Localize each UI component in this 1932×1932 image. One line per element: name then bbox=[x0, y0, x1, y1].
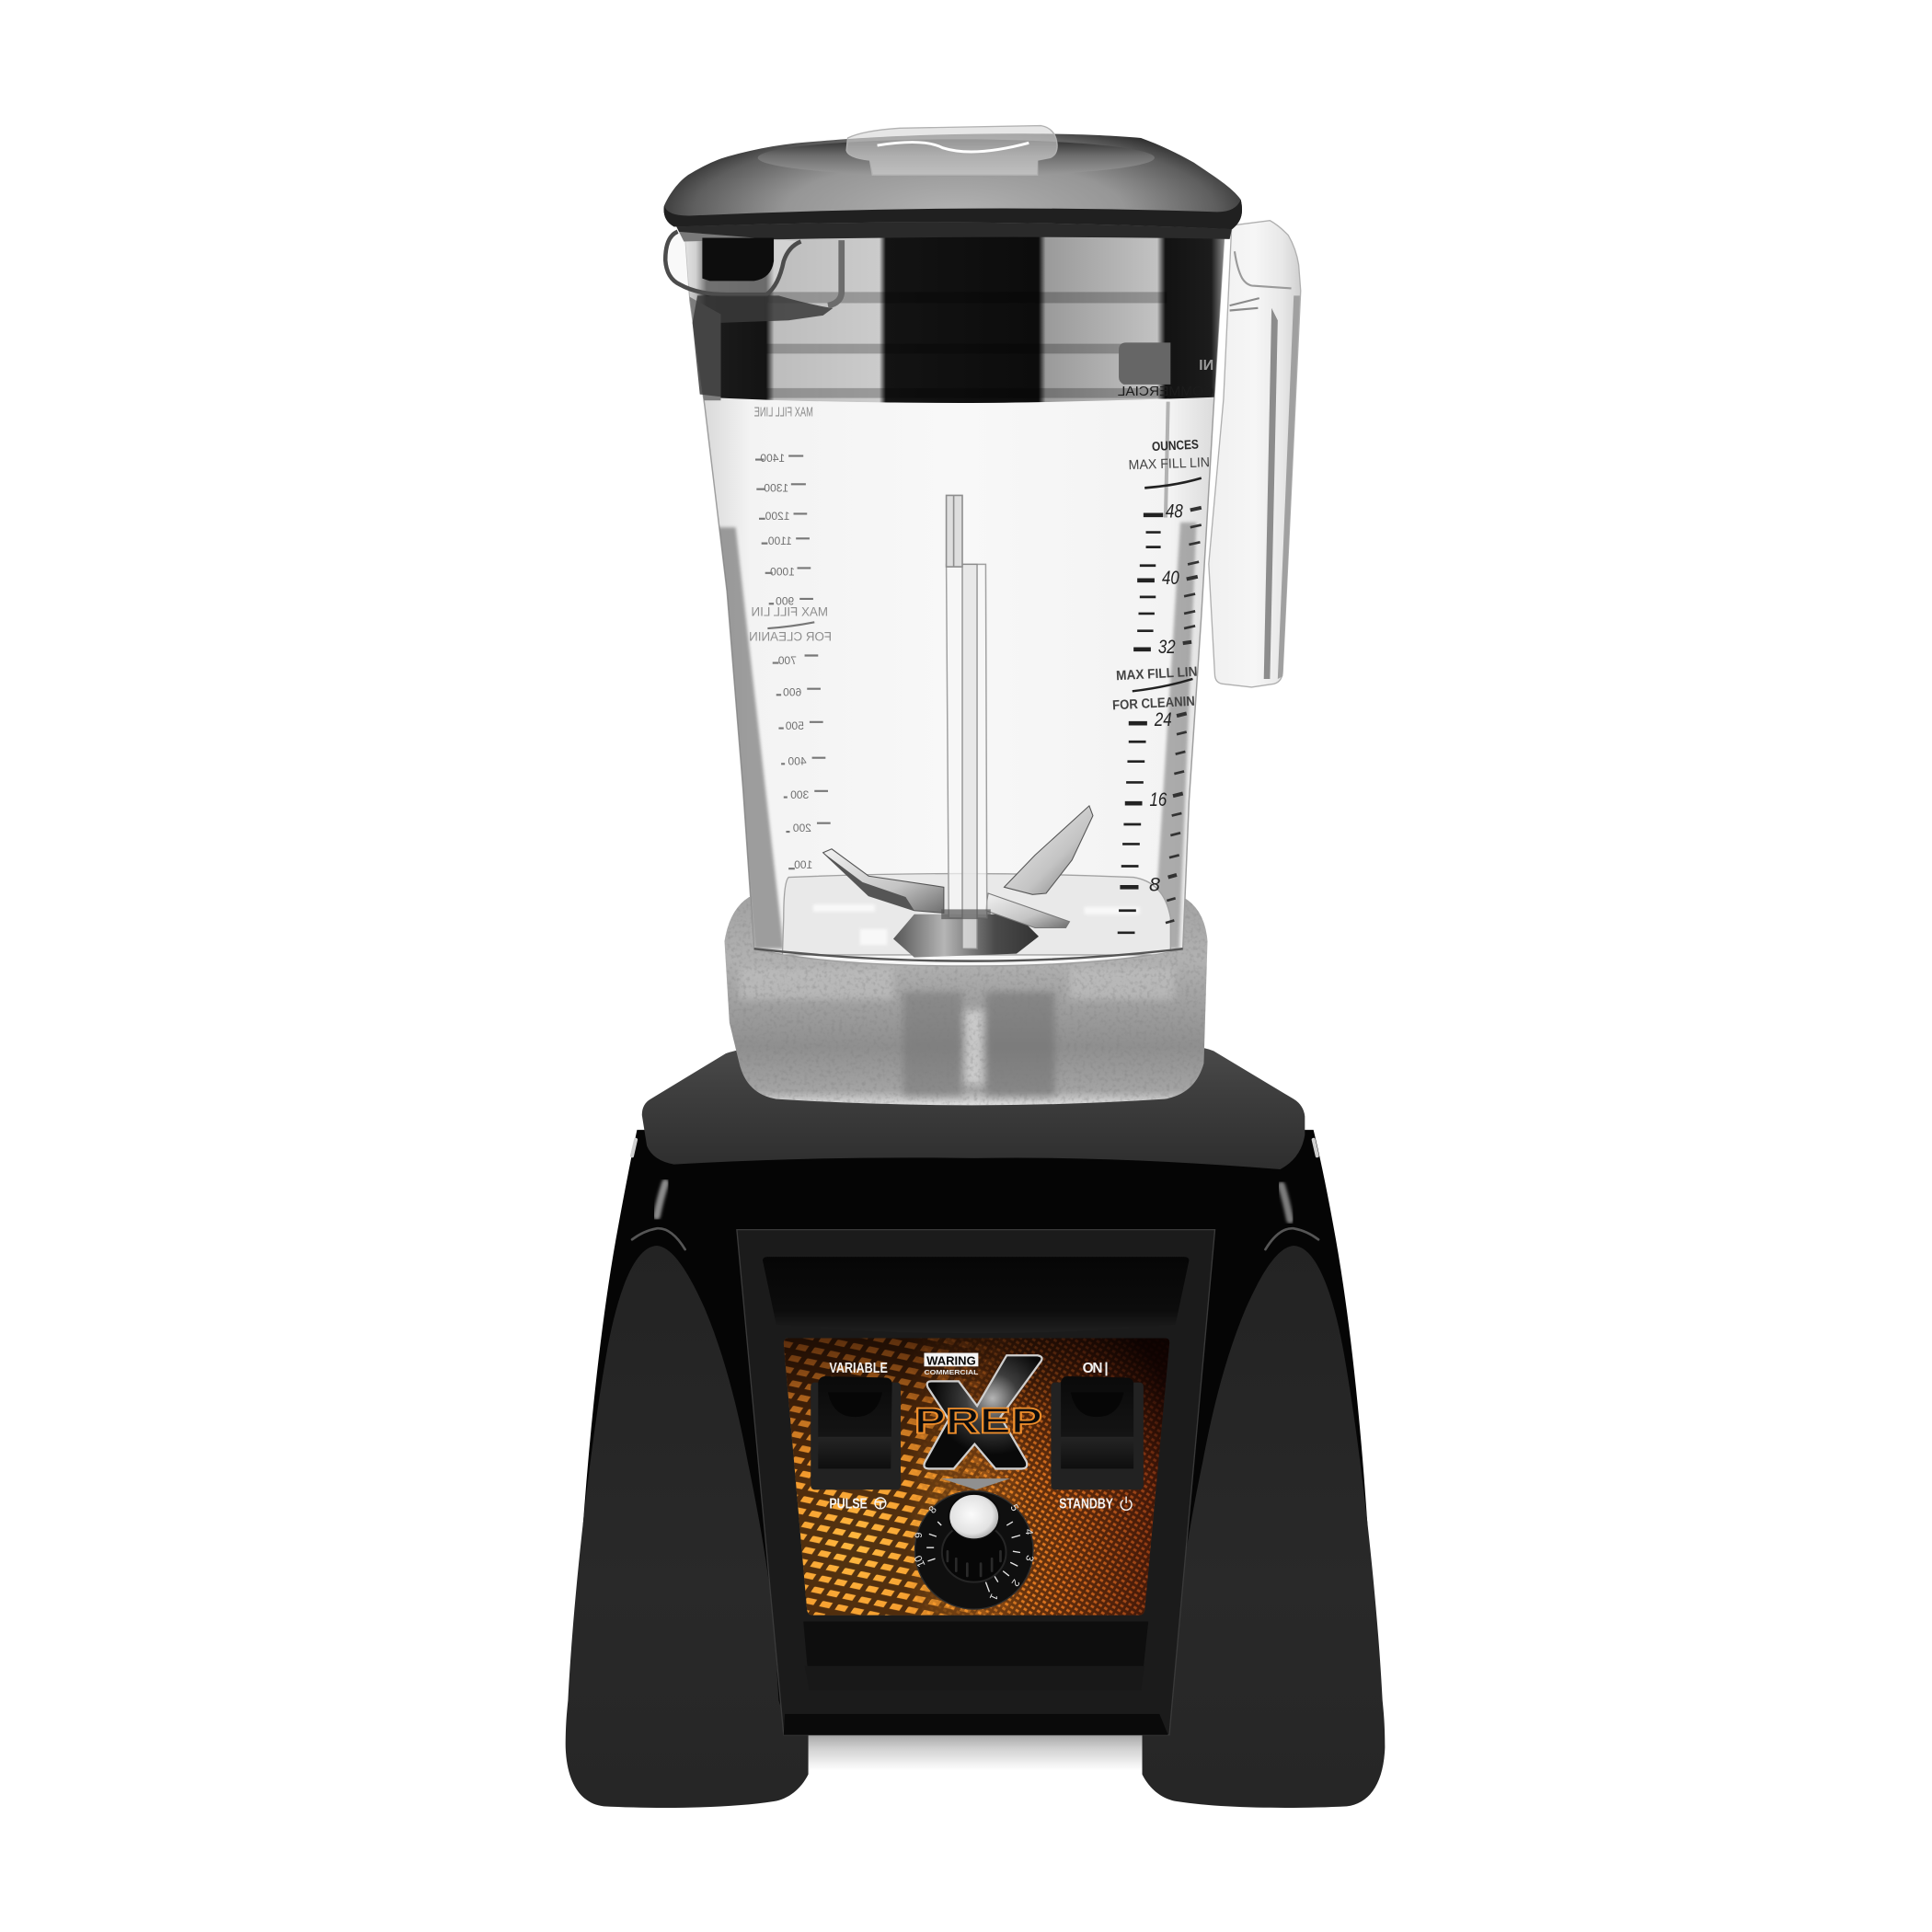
knob grip bbox=[942, 1523, 1006, 1582]
ounce numbers: 8 bbox=[1149, 873, 1160, 895]
ounces heading: OUNCES bbox=[1152, 437, 1199, 454]
commercial badge shadow bbox=[1119, 342, 1170, 385]
spout loop bbox=[665, 232, 801, 294]
dial numbers: 3 bbox=[1023, 1554, 1035, 1562]
dial numbers bbox=[913, 1502, 1035, 1602]
dial numbers: 4 bbox=[1023, 1528, 1034, 1535]
clear filler plug bbox=[846, 126, 1057, 175]
knob cap bbox=[949, 1494, 999, 1539]
mirrored millilitre numbers bbox=[760, 452, 812, 871]
product illustration: blender bbox=[565, 125, 1386, 1808]
ounce numbers: 24 bbox=[1154, 708, 1172, 730]
mirrored millilitre numbers: 400 bbox=[788, 755, 807, 768]
gloss highlights on base bbox=[632, 1140, 1318, 1249]
shaft nut bbox=[941, 909, 991, 919]
right side panel and foot bbox=[1143, 1246, 1385, 1808]
jar bottom rim bbox=[754, 949, 1183, 961]
ounce numbers: 48 bbox=[1166, 500, 1183, 522]
jar handle bbox=[1209, 221, 1301, 687]
dial numbers: 8 bbox=[927, 1504, 939, 1516]
ounce numbers: 16 bbox=[1150, 788, 1167, 811]
logo X bbox=[924, 1355, 1041, 1468]
logo: Waring Commercial Xtreme Prep bbox=[914, 1353, 1042, 1468]
mirrored max fill label: MAX FILL LINE bbox=[754, 406, 813, 420]
dial numbers: 2 bbox=[1009, 1577, 1021, 1588]
horizontal bands on insert bbox=[766, 292, 1167, 398]
mirrored millilitre numbers: 300 bbox=[790, 788, 809, 801]
mirrored millilitre numbers: 1300 bbox=[764, 481, 788, 494]
handle small mark bbox=[1230, 298, 1259, 311]
handle inner grey stripe bbox=[1264, 308, 1278, 679]
switch label: STANDBY: STANDBY bbox=[1059, 1496, 1114, 1512]
lower recess highlight strip bbox=[805, 1666, 1144, 1691]
large mesh texture bbox=[784, 1338, 1022, 1616]
right blade upper bbox=[1005, 806, 1093, 894]
clear jar body bbox=[685, 226, 1225, 966]
mirrored millilitre numbers: 1200 bbox=[765, 510, 789, 523]
rocker switch: on / standby bbox=[1051, 1376, 1144, 1489]
floor reflections bbox=[813, 904, 1140, 945]
dial numbers: 10 bbox=[913, 1554, 928, 1569]
lower recess bbox=[803, 1621, 1148, 1691]
control panel graphic bbox=[776, 1330, 1177, 1627]
dial ticks bbox=[926, 1522, 1020, 1592]
dial ring bbox=[914, 1491, 1033, 1609]
right blade lower bbox=[985, 893, 1069, 927]
reversed commercial wording: COMMERCIAL bbox=[1118, 385, 1213, 399]
switch label: ON: ON | bbox=[1083, 1361, 1109, 1376]
jar collar: frosted base bbox=[720, 893, 1213, 1109]
logo word PREP: PREP bbox=[914, 1402, 1042, 1442]
logo word COMMERCIAL: COMMERCIAL bbox=[924, 1368, 979, 1376]
orange gradient backing bbox=[776, 1330, 1177, 1627]
mirrored millilitre numbers: 900 bbox=[776, 595, 794, 608]
mirrored millilitre numbers: 100 bbox=[794, 858, 812, 871]
fine mesh texture bbox=[913, 1338, 1166, 1616]
handle head moulding bbox=[1235, 251, 1292, 288]
floor shadow under base bbox=[807, 1731, 1144, 1771]
blade assembly bbox=[823, 495, 1093, 958]
left blade dark underside bbox=[823, 853, 914, 911]
spout vertical channel bbox=[828, 240, 842, 305]
max fill label: MAX FILL LIN bbox=[1128, 455, 1210, 473]
handle body bbox=[1209, 221, 1301, 687]
switch label: VARIABLE: VARIABLE bbox=[829, 1361, 888, 1376]
ounce numbers: 40 bbox=[1162, 567, 1179, 589]
dial numbers: 5 bbox=[1007, 1502, 1020, 1513]
ounce ticks left bbox=[1118, 478, 1202, 933]
mirrored millilitre numbers: 1100 bbox=[768, 535, 792, 547]
millilitre ticks bbox=[755, 456, 831, 868]
millilitre scale, mirrored from the rear of the jar bbox=[749, 406, 832, 871]
mirrored millilitre numbers: 200 bbox=[793, 822, 811, 834]
lid body bbox=[664, 133, 1242, 229]
collar shading blocks and frost texture bbox=[720, 893, 1213, 1109]
mirrored cleaning labels: FOR CLEANIN bbox=[749, 629, 832, 643]
right glass wall stripe bbox=[1154, 523, 1196, 949]
mirrored millilitre numbers: 700 bbox=[777, 654, 797, 667]
mirrored millilitre numbers: 1000 bbox=[770, 565, 795, 578]
upper recess bbox=[763, 1257, 1189, 1333]
switch label: PULSE: PULSE bbox=[829, 1496, 868, 1512]
mirrored millilitre numbers: 600 bbox=[783, 686, 801, 699]
mirrored millilitre numbers: 1400 bbox=[760, 452, 785, 465]
collar body bbox=[725, 897, 1207, 1105]
base top cap bbox=[642, 1047, 1305, 1169]
speed dial knob bbox=[913, 1491, 1035, 1609]
plug highlight bbox=[878, 143, 1029, 152]
left side panel and foot bbox=[566, 1246, 809, 1808]
pointer triangle bbox=[941, 1478, 1010, 1489]
lid well bbox=[758, 139, 1155, 177]
upper rod bbox=[947, 495, 962, 567]
icon: pulse bbox=[875, 1498, 886, 1509]
mirrored cleaning labels bbox=[749, 605, 832, 643]
ounce ticks right bbox=[1166, 508, 1202, 923]
left glass wall stripe bbox=[715, 527, 784, 949]
jar top band below lid bbox=[674, 222, 1234, 241]
outer frame bbox=[737, 1230, 1215, 1735]
motor base bbox=[566, 1047, 1385, 1808]
ounces scale bbox=[1112, 437, 1210, 933]
dial numbers: 9 bbox=[914, 1533, 925, 1538]
central shaft tube bbox=[947, 564, 987, 918]
icon: power bbox=[1121, 1497, 1132, 1510]
logo box WARING: WARING bbox=[926, 1353, 976, 1367]
mirrored cleaning labels: MAX FILL LIN bbox=[751, 605, 828, 619]
shaft core bbox=[962, 564, 977, 949]
control panel housing bbox=[737, 1230, 1215, 1735]
rocker switch: variable / pulse bbox=[811, 1376, 901, 1489]
cleaning max fill label: MAX FILL LIN bbox=[1116, 665, 1198, 684]
blender jar bbox=[665, 222, 1234, 966]
drive hub bbox=[893, 914, 1039, 958]
for cleaning label: FOR CLEANIN bbox=[1112, 695, 1195, 713]
handle outer grey stripe bbox=[1278, 295, 1300, 679]
faint vertical wall line bbox=[1166, 402, 1168, 517]
reversed commercial badge text: NI bbox=[1199, 357, 1213, 374]
dark upper lid insert bbox=[680, 222, 1227, 403]
jar floor outline bbox=[782, 874, 1170, 955]
knob flutes bbox=[947, 1550, 1002, 1577]
spout moulding bbox=[693, 295, 833, 397]
light left column of insert bbox=[687, 295, 720, 400]
jar lid bbox=[664, 126, 1242, 229]
dial numbers: 1 bbox=[987, 1592, 999, 1602]
frame bottom lip bbox=[784, 1714, 1168, 1735]
spout dark interior bbox=[702, 237, 774, 281]
mirrored millilitre numbers: 500 bbox=[785, 719, 804, 732]
base body bbox=[573, 1130, 1377, 1735]
top darkening bbox=[784, 1338, 1169, 1466]
lid rim bbox=[664, 200, 1242, 229]
ounce numbers: 32 bbox=[1158, 636, 1176, 658]
left blade bbox=[823, 849, 944, 913]
ounce numbers bbox=[1149, 500, 1183, 895]
